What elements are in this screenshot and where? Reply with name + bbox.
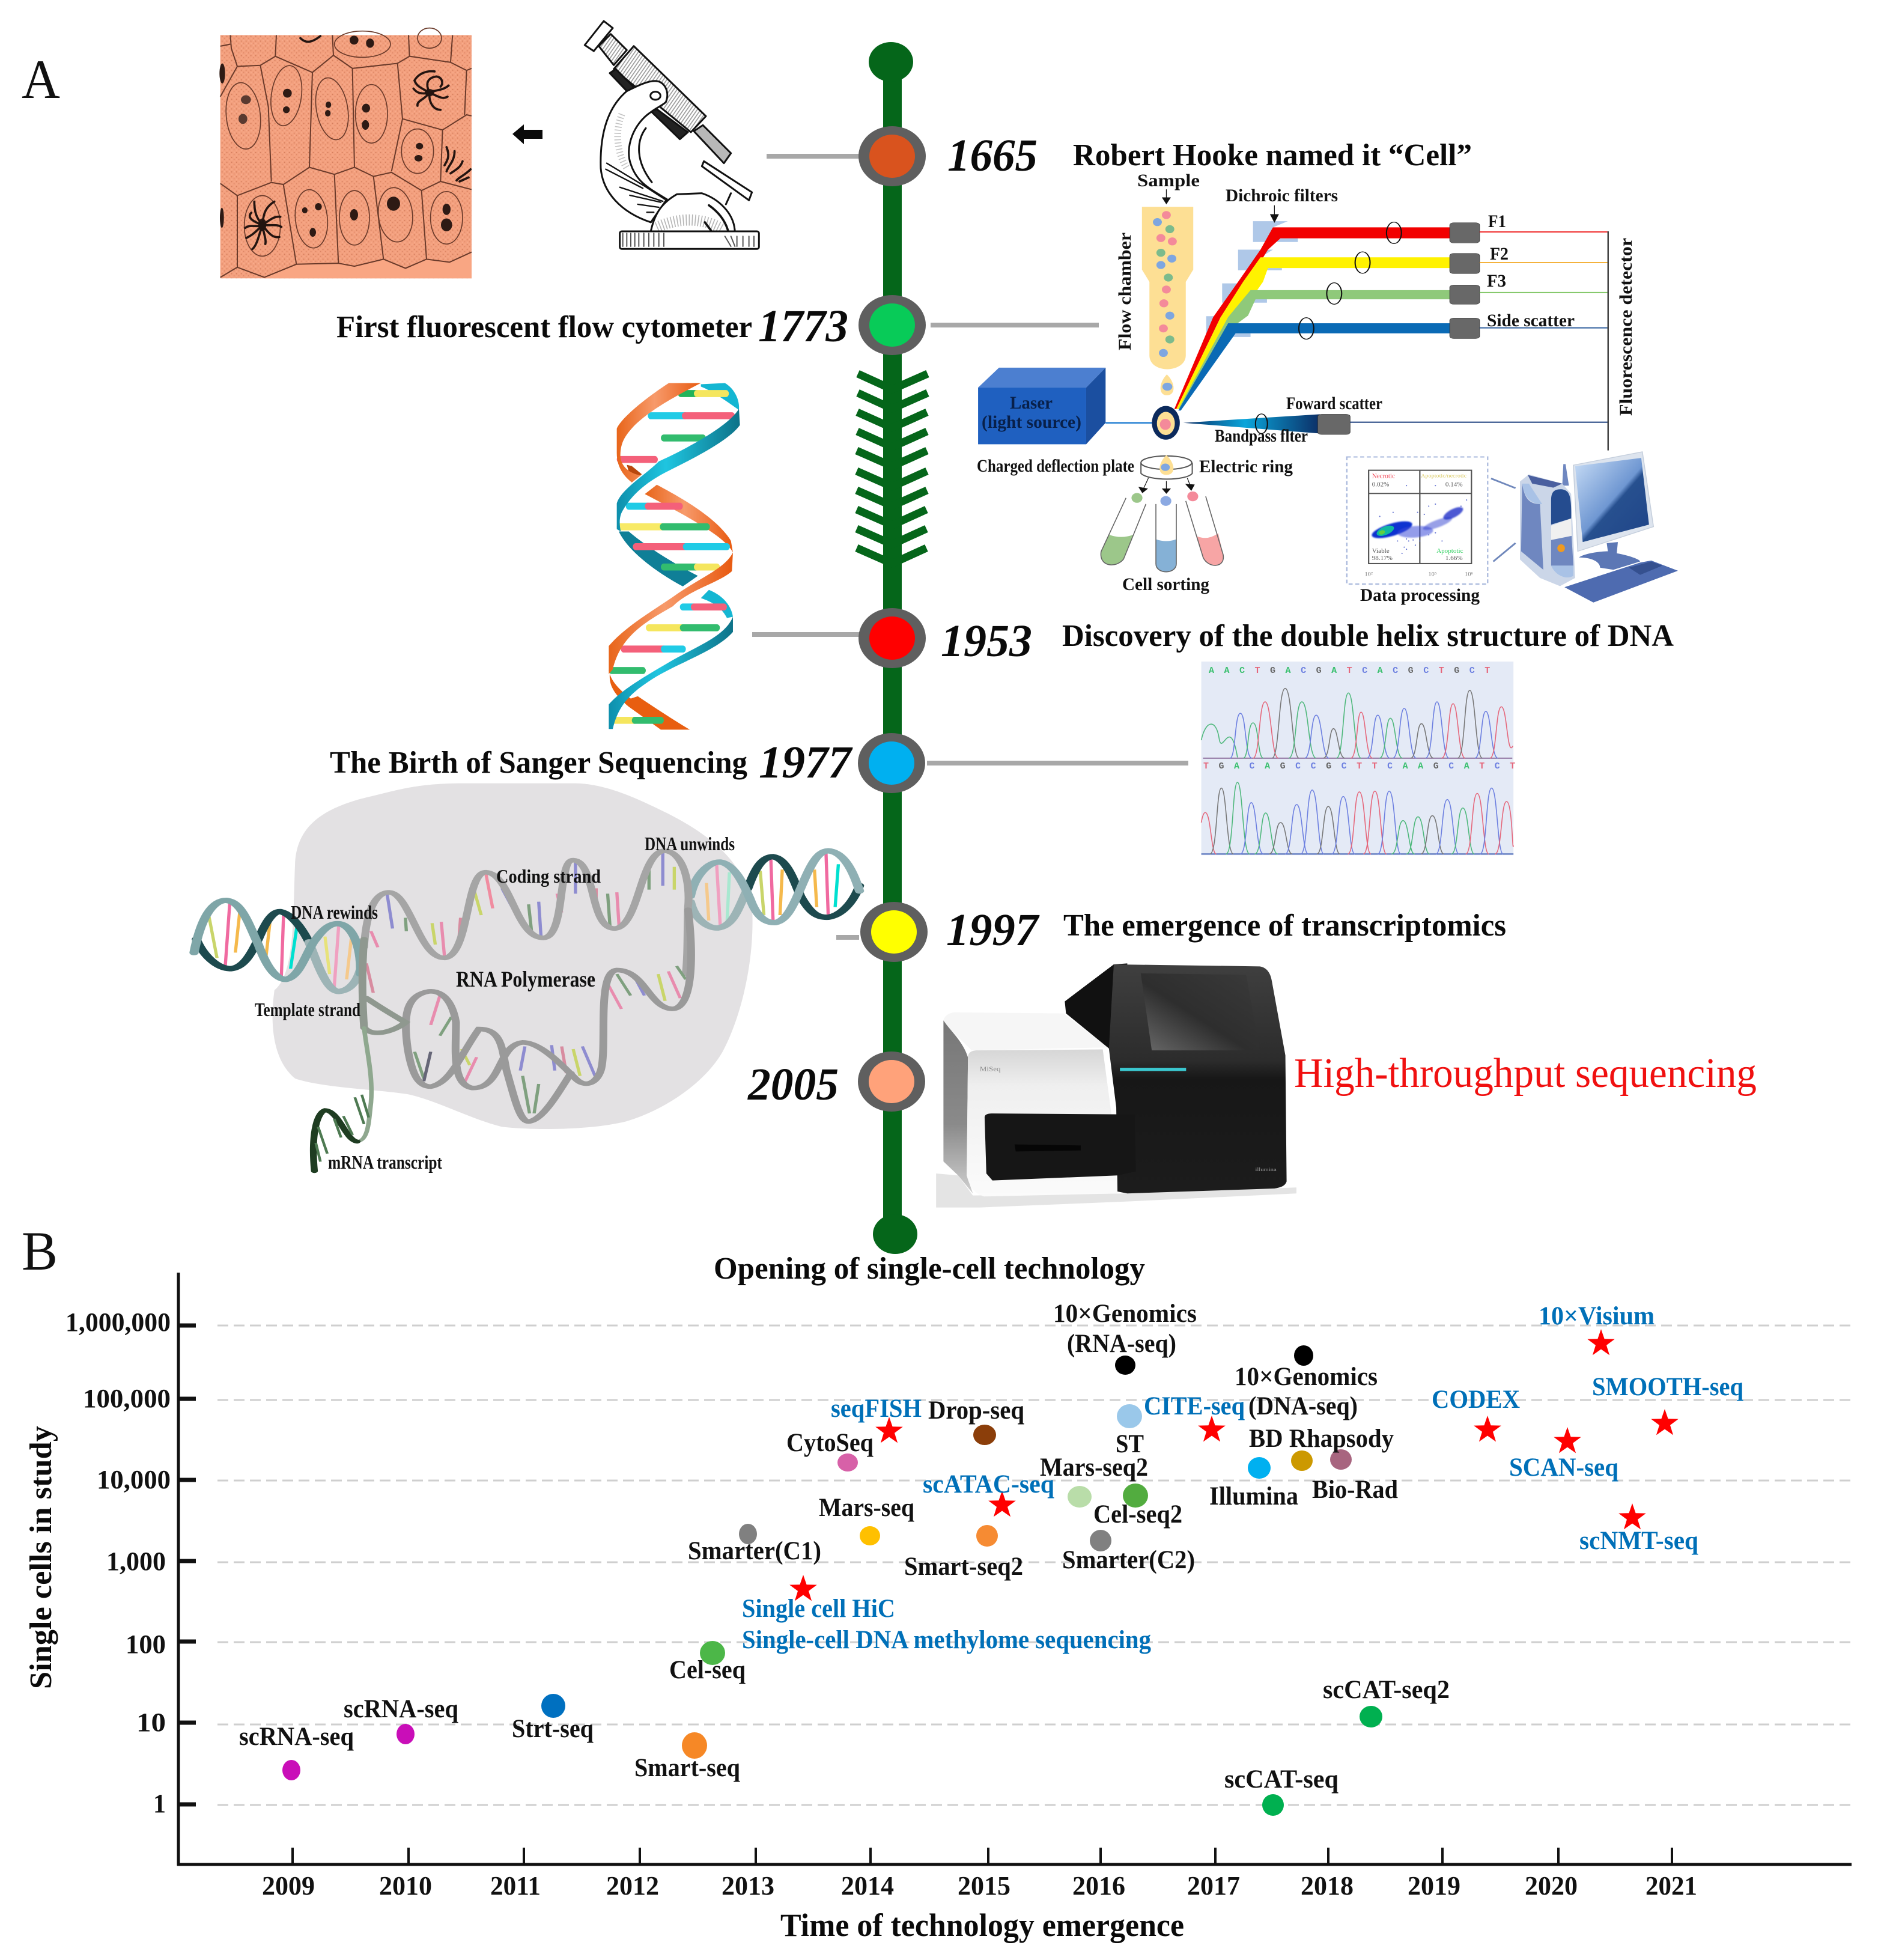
y axis labels: 1,000,000: [65, 1307, 171, 1337]
bottom trace: [1202, 782, 1513, 854]
cytometer labels: Charged deflection plate: [977, 456, 1134, 476]
panel A: historical timeline: [22, 21, 1757, 1286]
black technology labels: Drop-seq: [928, 1396, 1024, 1425]
black technology labels: Mars-seq: [819, 1494, 914, 1522]
cytometer labels: F2: [1490, 244, 1509, 264]
black technology labels: 10×Genomics: [1053, 1300, 1197, 1328]
heading: opening of single-cell technology: Opening of single-cell technology: [714, 1252, 1145, 1286]
image: cells drawing: [219, 28, 472, 278]
cytometer labels: Bandpass flter: [1215, 426, 1308, 446]
cytometer labels: Data processing: [1360, 585, 1480, 605]
y axis labels: 100,000: [83, 1384, 171, 1413]
y axis labels: 1,000: [106, 1547, 166, 1576]
black technology labels: CytoSeq: [786, 1429, 874, 1457]
panel B: single-cell technologies chart: [22, 1220, 1852, 1943]
heading: double helix: Discovery of the double helix structure of DNA: [1062, 619, 1674, 653]
x axis labels: 2019: [1408, 1871, 1460, 1901]
panel letter A: A: [22, 49, 60, 110]
cytometer labels: Side scatter: [1487, 311, 1575, 330]
transcription labels: mRNA transcript: [328, 1151, 442, 1173]
year 1977: 1977: [759, 737, 853, 788]
black technology labels: scRNA-seq: [239, 1723, 354, 1751]
laser: [978, 368, 1156, 444]
fluorescence beams: [1174, 227, 1452, 410]
blue technology labels: Single cell HiC: [742, 1595, 895, 1623]
x axis labels: 2011: [490, 1871, 541, 1901]
blue technology labels: SMOOTH-seq: [1592, 1373, 1743, 1401]
year 1953: 1953: [941, 616, 1032, 666]
chart: flow cytometry data plot: 98.17%: [1372, 555, 1393, 562]
cytometer labels: Fluorescence detector: [1616, 238, 1636, 416]
back ribbons: [610, 383, 739, 729]
coding strand: [364, 851, 688, 974]
chart: flow cytometry data plot: 10⁵: [1428, 571, 1436, 577]
node 1773: [858, 295, 926, 355]
x axis labels: 2009: [262, 1871, 315, 1901]
transcription labels: DNA rewinds: [291, 901, 378, 923]
blue technology labels: [742, 1302, 1743, 1654]
black technology labels: BD Rhapsody: [1249, 1425, 1394, 1453]
base pair rungs: [612, 394, 732, 720]
transcription labels: Template strand: [255, 999, 360, 1020]
axes and ticks: [177, 1273, 1852, 1866]
chart: flow cytometry data plot: 0.14%: [1445, 481, 1463, 488]
chart: flow cytometry data plot: 1.66%: [1445, 555, 1463, 562]
mRNA transcript: [314, 1027, 371, 1171]
x axis title: Time of technology emergence: [780, 1907, 1184, 1943]
chart: flow cytometry data plot: 10²: [1364, 571, 1373, 577]
y axis labels: [65, 1307, 171, 1818]
cytometer labels: Foward scatter: [1286, 394, 1382, 413]
blue technology labels: scATAC-seq: [923, 1470, 1054, 1499]
node 2005: [858, 1052, 925, 1112]
black technology labels: Smarter(C1): [688, 1537, 821, 1565]
x axis labels: [262, 1871, 1697, 1901]
heading: high-throughput sequencing: High-throughput sequencing: [1294, 1050, 1757, 1097]
blue technology labels: CODEX: [1432, 1386, 1520, 1414]
transcription labels: DNA unwinds: [645, 833, 735, 854]
top trace: [1202, 689, 1513, 758]
cytometer labels: Dichroic filters: [1226, 186, 1338, 205]
x axis labels: 2021: [1645, 1871, 1697, 1901]
node 1953: [858, 608, 926, 668]
cytometer labels: Electric ring: [1199, 457, 1293, 476]
diagram: DNA double helix: [609, 383, 740, 729]
heading: Sanger sequencing: The Birth of Sanger Sequencing: [330, 746, 747, 780]
transcription labels: [255, 833, 735, 1173]
rewinding DNA helix: [194, 900, 362, 991]
chart: flow cytometry data plot: Necrotic: [1372, 473, 1395, 480]
heading: transcriptomics: The emergence of transcriptomics: [1063, 908, 1506, 943]
dichroic filters: [1206, 221, 1298, 337]
front ribbons: [609, 383, 740, 729]
transcription labels: Coding strand: [496, 865, 601, 887]
black technology labels: scCAT-seq2: [1323, 1676, 1450, 1704]
chart: flow cytometry data plot: [1347, 457, 1487, 584]
unwinding DNA helix: [690, 851, 860, 928]
chart: Sanger sequencing chromatogram: [1202, 662, 1525, 855]
test tubes: [1101, 492, 1223, 572]
dichroic arrow: [1271, 205, 1278, 222]
black technology labels: ST: [1116, 1430, 1144, 1458]
blue technology labels: 10×Visium: [1539, 1302, 1655, 1330]
flow chamber: [1142, 207, 1193, 395]
sample arrow: [1162, 189, 1170, 204]
chart: flow cytometry data plot: Apoptotic: [1436, 547, 1463, 555]
black technology labels: Smarter(C2): [1062, 1546, 1195, 1574]
diagram: transcription bubble: [194, 784, 860, 1173]
blue technology labels: scNMT-seq: [1579, 1527, 1698, 1555]
chart: flow cytometry data plot: 10⁶: [1465, 571, 1474, 577]
image: sequencing machine: illumina: [1255, 1167, 1277, 1173]
cytometer labels: Flow chamber: [1115, 233, 1135, 350]
x axis labels: 2016: [1072, 1871, 1125, 1901]
data points: technology dots: [282, 1345, 1382, 1816]
cytometer labels: [977, 171, 1636, 605]
chart: flow cytometry data plot: 0.02%: [1372, 481, 1389, 488]
black technology labels: Bio-Rad: [1312, 1476, 1398, 1504]
diagram: flow cytometer: [977, 171, 1636, 605]
black technology labels: [239, 1300, 1450, 1794]
sorting arrows: [1139, 478, 1194, 493]
arrow: left pointing: [512, 124, 542, 144]
cytometer labels: F1: [1488, 212, 1506, 231]
black technology labels: (RNA-seq): [1067, 1330, 1176, 1358]
lenses: [1256, 222, 1402, 434]
x axis labels: 2017: [1187, 1871, 1240, 1901]
black technology labels: Illumina: [1209, 1482, 1298, 1511]
x axis labels: 2013: [722, 1871, 774, 1901]
cytometer labels: Laser: [1010, 393, 1053, 413]
interrogation cell: [1152, 406, 1180, 440]
cytometer labels: F3: [1487, 271, 1506, 291]
black technology labels: Mars-seq2: [1040, 1453, 1148, 1482]
image: sequencing machine: [936, 963, 1296, 1208]
node 1665: [858, 126, 926, 186]
chart: flow cytometry data plot: Apoptotic/necrotic: [1421, 473, 1466, 479]
y axis labels: 10,000: [97, 1465, 171, 1494]
node 1997: [860, 902, 928, 962]
flow cytometer shapes: [978, 189, 1608, 572]
heading: flow cytometer: First fluorescent flow cytometer: [336, 310, 752, 344]
cytometer labels: (light source): [982, 412, 1081, 432]
blue technology labels: seqFISH: [831, 1395, 922, 1423]
chart: flow cytometry data plot: Viable: [1372, 547, 1390, 555]
timeline spine with end caps and herringbone: [857, 42, 928, 1254]
blue technology labels: CITE-seq: [1144, 1392, 1245, 1420]
year 1997: 1997: [946, 905, 1040, 955]
detector output lines: [1350, 231, 1608, 451]
blue technology labels: SCAN-seq: [1509, 1453, 1618, 1482]
node 1977: [858, 733, 925, 793]
x axis labels: 2015: [958, 1871, 1010, 1901]
transcription labels: RNA Polymerase: [456, 967, 595, 992]
black technology labels: Cel-seq2: [1093, 1500, 1182, 1529]
black technology labels: Smart-seq2: [904, 1553, 1023, 1581]
template strand: [362, 910, 691, 1122]
polymerase blob: [273, 784, 753, 1129]
black technology labels: Smart-seq: [634, 1754, 740, 1782]
black technology labels: Cel-seq: [669, 1656, 746, 1684]
black technology labels: 10×Genomics: [1235, 1363, 1378, 1391]
y axis labels: 100: [126, 1630, 166, 1659]
year 2005: 2005: [747, 1059, 839, 1110]
data points: multi-omics stars: [789, 1329, 1679, 1601]
black technology labels: scCAT-seq: [1224, 1765, 1339, 1794]
x axis labels: 2014: [841, 1871, 894, 1901]
y axis title: Single cells in study: [24, 1426, 58, 1689]
x axis labels: 2018: [1301, 1871, 1354, 1901]
year 1773: 1773: [758, 301, 848, 352]
gridlines: [217, 1325, 1852, 1805]
icon: microscope: [585, 21, 759, 249]
electric ring: [1141, 455, 1193, 479]
x axis labels: 2010: [379, 1871, 432, 1901]
image: sequencing machine: MiSeq: [980, 1065, 1001, 1073]
black technology labels: Strt-seq: [512, 1715, 594, 1743]
base calls top: AACTGACGATCACGCTGCT: [1209, 666, 1500, 676]
blue technology labels: Single-cell DNA methylome sequencing: [742, 1626, 1151, 1654]
connector lines: [752, 156, 1188, 937]
black technology labels: (DNA-seq): [1248, 1392, 1358, 1420]
cytometer labels: Cell sorting: [1122, 574, 1209, 594]
x axis labels: 2012: [606, 1871, 659, 1901]
y axis labels: 1: [153, 1789, 166, 1818]
x axis labels: 2020: [1525, 1871, 1578, 1901]
y axis labels: 10: [136, 1708, 166, 1737]
cytometer labels: Sample: [1137, 171, 1200, 190]
black technology labels: scRNA-seq: [344, 1695, 458, 1723]
icon: desktop computer: [1491, 452, 1678, 603]
detectors: [1317, 223, 1480, 434]
base calls bottom: TGACAGCCGCTTCAAGCATCT: [1203, 761, 1525, 772]
forward scatter beam: [1184, 414, 1320, 434]
heading: Robert Hooke: Robert Hooke named it “Cell”: [1073, 138, 1472, 172]
year 1665: 1665: [947, 130, 1038, 181]
panel letter B: B: [22, 1220, 58, 1282]
